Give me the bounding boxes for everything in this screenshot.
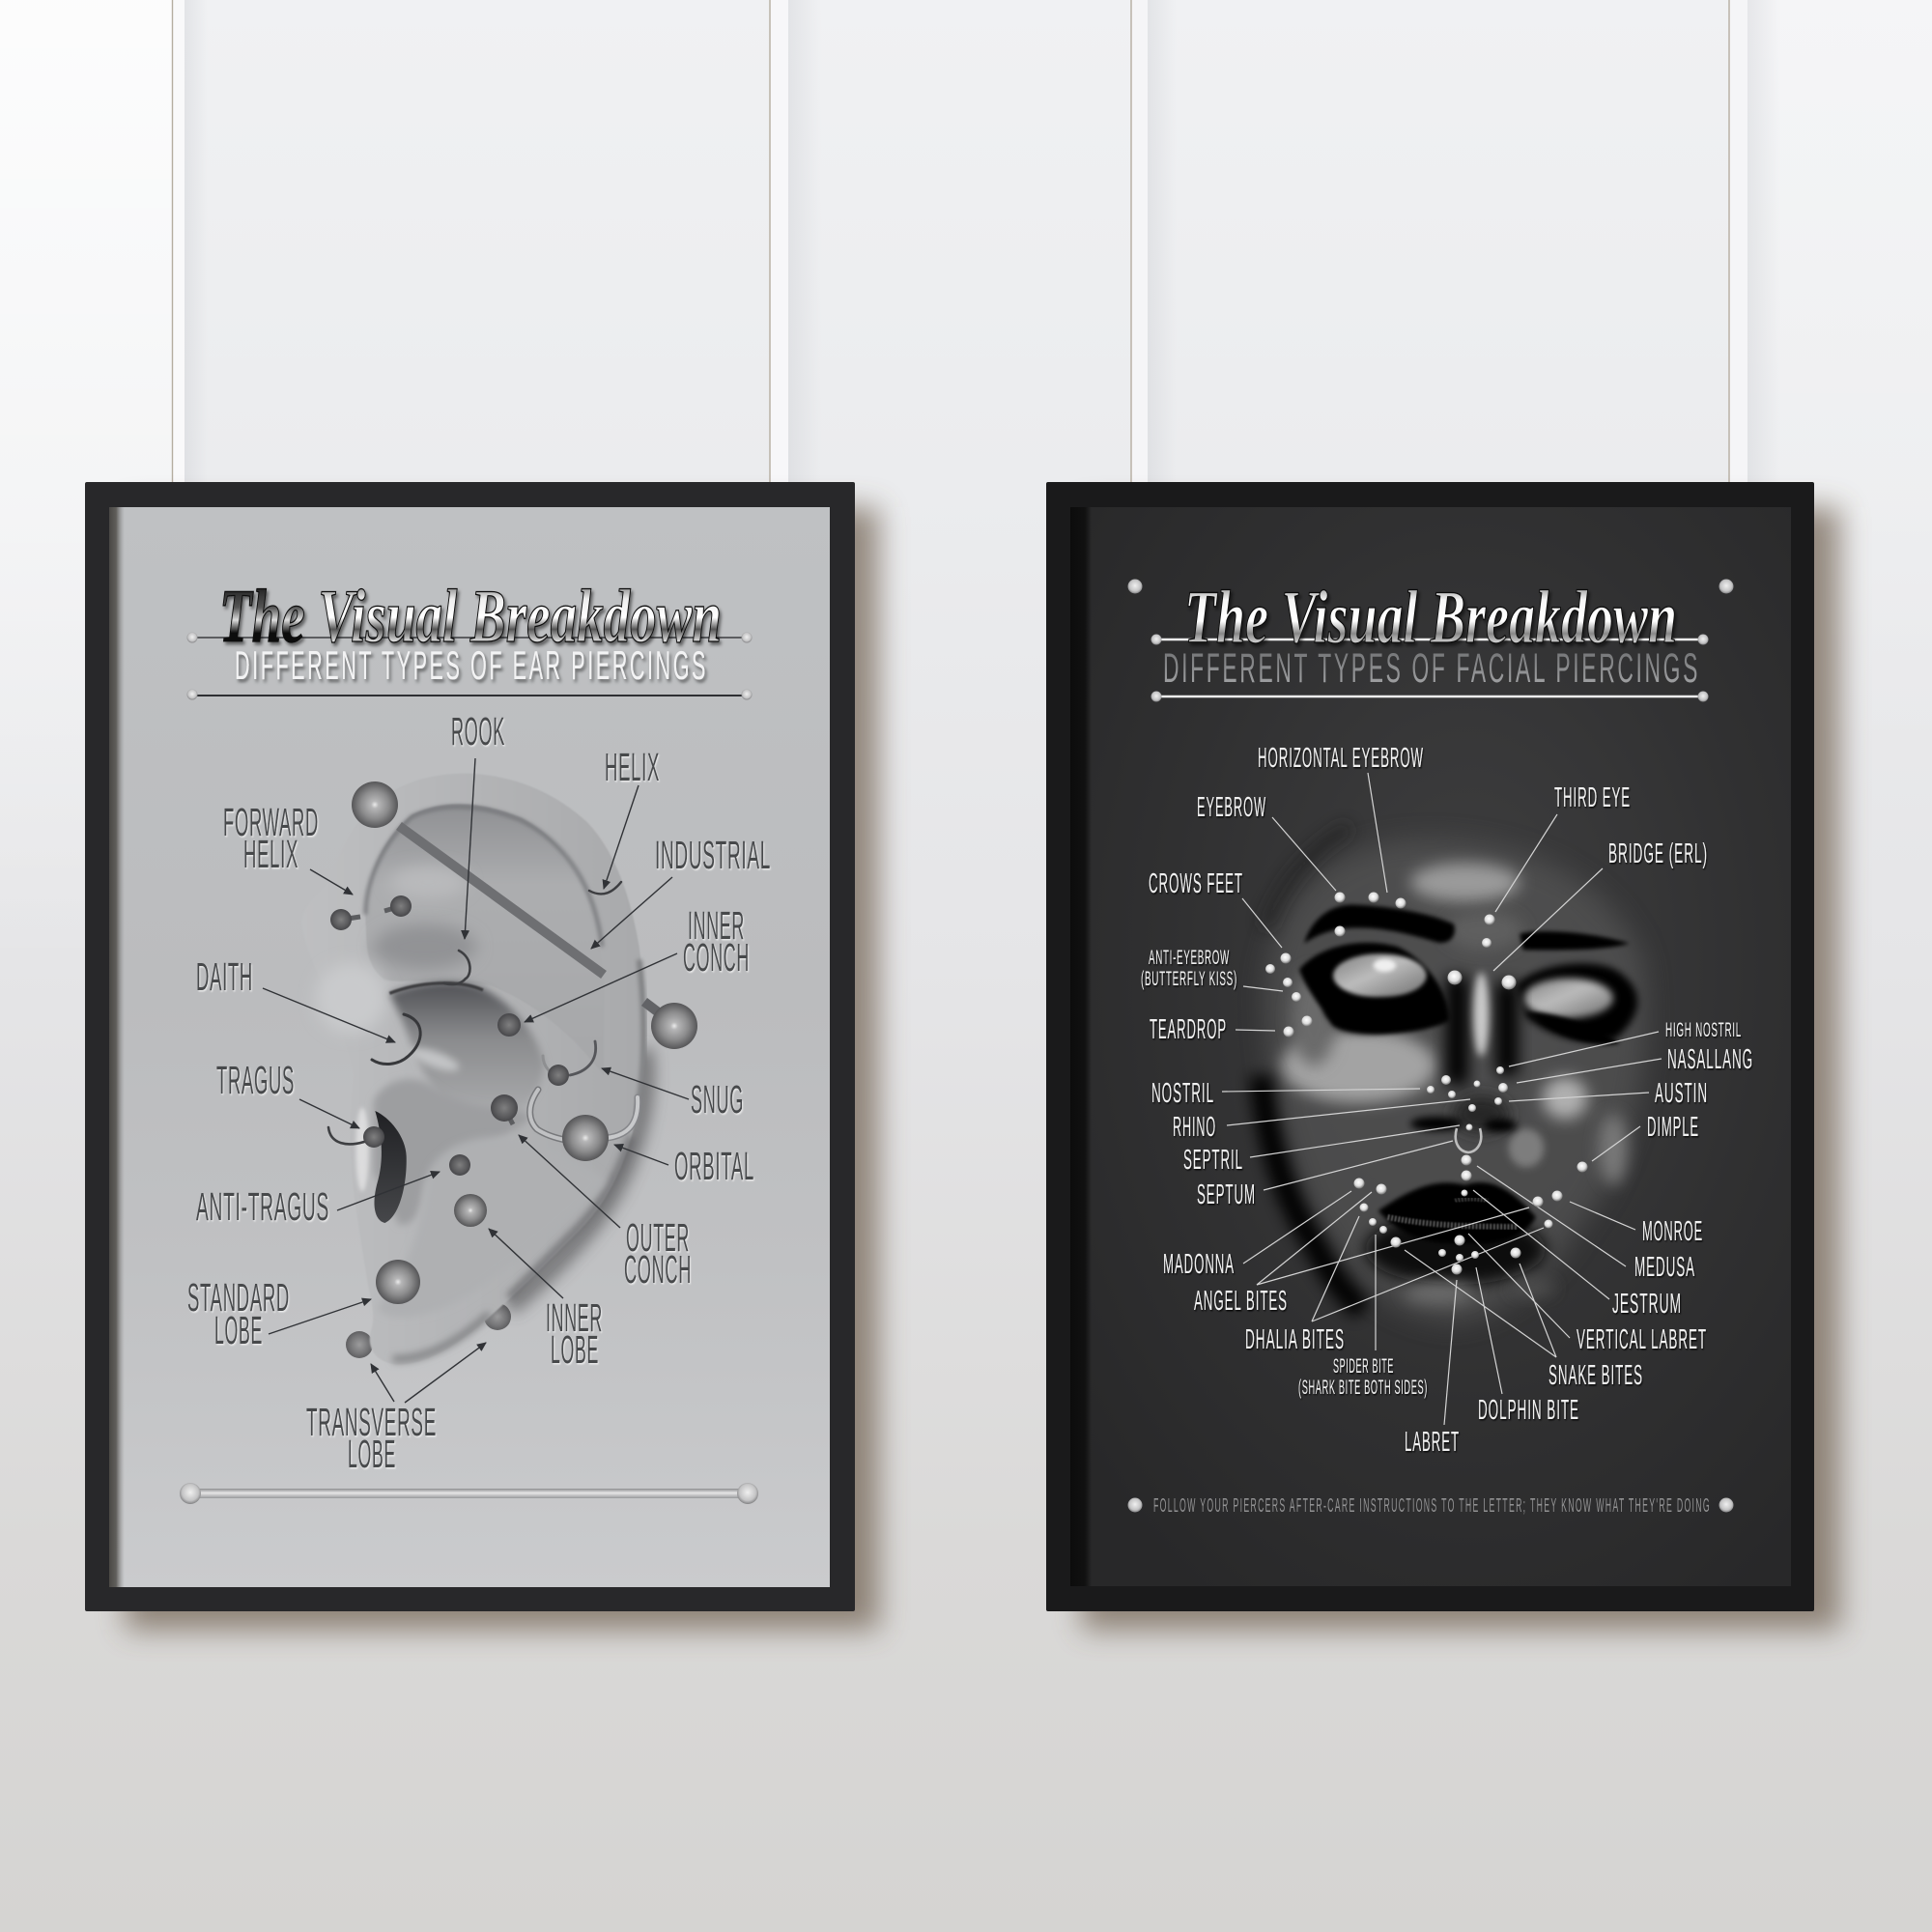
subtitle: ear poster: DIFFERENT TYPES OF EAR PIERCINGS bbox=[235, 642, 708, 688]
ear labels: CONCH bbox=[683, 935, 750, 980]
ear labels: DAITH bbox=[196, 954, 253, 999]
ear labels bbox=[187, 709, 771, 1476]
face labels: HIGH NOSTRIL bbox=[1665, 1019, 1742, 1041]
poster: ear piercings bbox=[85, 482, 855, 1611]
poster: facial piercings bbox=[1046, 482, 1814, 1611]
ear arrows bbox=[263, 758, 689, 1403]
label: inner conch bbox=[683, 903, 750, 980]
label: anti-eyebrow bbox=[1141, 947, 1237, 990]
corner studs bbox=[1128, 580, 1733, 1513]
label: transverse lobe: LOBE bbox=[348, 1432, 396, 1476]
industrial bar bbox=[399, 826, 676, 1026]
ear labels: OUTER bbox=[626, 1215, 690, 1260]
face labels: (SHARK BITE BOTH SIDES) bbox=[1298, 1377, 1428, 1399]
septum ring bbox=[1456, 1128, 1481, 1152]
face labels: ANGEL BITES bbox=[1194, 1286, 1288, 1317]
face labels: SEPTUM bbox=[1197, 1179, 1256, 1210]
ear labels: INNER bbox=[688, 903, 745, 948]
face labels: THIRD EYE bbox=[1554, 782, 1631, 813]
ear labels: LOBE bbox=[551, 1327, 599, 1372]
frame: left poster bbox=[85, 482, 855, 1611]
label: spider bite bbox=[1298, 1355, 1428, 1399]
face labels: VERTICAL LABRET bbox=[1577, 1324, 1707, 1355]
heading rules: ear poster bbox=[187, 632, 752, 699]
face labels: DOLPHIN BITE bbox=[1478, 1395, 1579, 1426]
ear labels: INNER bbox=[546, 1295, 603, 1340]
label: forward helix bbox=[223, 800, 319, 876]
title: ear poster: The Visual Breakdown bbox=[219, 574, 722, 658]
label: spider bite: SPIDER BITE bbox=[1333, 1355, 1394, 1378]
barbell divider bbox=[180, 1483, 758, 1504]
paper: right poster bbox=[1070, 507, 1791, 1586]
face pointer lines bbox=[1222, 773, 1662, 1425]
face labels: MEDUSA bbox=[1634, 1252, 1695, 1283]
transverse lobe studs behind ear bbox=[346, 1303, 511, 1358]
face labels: EYEBROW bbox=[1197, 792, 1266, 823]
ear labels: TRAGUS bbox=[216, 1058, 295, 1102]
poster: ear piercings: INDUSTRIAL bbox=[655, 833, 771, 877]
ear labels: ORBITAL bbox=[674, 1144, 754, 1188]
ear illustration bbox=[302, 774, 645, 1365]
label: inner lobe bbox=[546, 1295, 603, 1372]
face labels: JESTRUM bbox=[1612, 1289, 1682, 1320]
label: transverse lobe bbox=[306, 1400, 437, 1476]
paper: left poster bbox=[109, 507, 830, 1587]
face labels: AUSTIN bbox=[1655, 1078, 1708, 1109]
hanging wires bbox=[172, 0, 1729, 483]
face labels: HORIZONTAL EYEBROW bbox=[1258, 743, 1424, 774]
face labels: DIMPLE bbox=[1647, 1112, 1699, 1143]
face labels: BRIDGE (ERL) bbox=[1608, 838, 1708, 869]
face illustration bbox=[1261, 828, 1646, 1321]
face labels: LABRET bbox=[1405, 1427, 1460, 1458]
label: forward helix: HELIX bbox=[243, 832, 298, 876]
piercing jewellery balls bbox=[330, 781, 697, 1304]
face labels: MADONNA bbox=[1163, 1249, 1235, 1280]
face labels: DHALIA BITES bbox=[1245, 1324, 1345, 1355]
face labels: TEARDROP bbox=[1150, 1014, 1227, 1045]
ear labels: TRANSVERSE bbox=[306, 1400, 437, 1444]
ear labels: FORWARD bbox=[223, 800, 319, 844]
label: standard lobe bbox=[187, 1275, 290, 1352]
face labels: MONROE bbox=[1642, 1216, 1703, 1247]
face labels: SEPTRIL bbox=[1183, 1145, 1243, 1176]
ear labels: CONCH bbox=[624, 1247, 692, 1292]
ear labels: STANDARD bbox=[187, 1275, 290, 1320]
ear labels: ANTI-TRAGUS bbox=[196, 1184, 329, 1229]
frame: right poster bbox=[1046, 482, 1814, 1611]
face labels bbox=[1141, 743, 1753, 1458]
label: anti-eyebrow: ANTI-EYEBROW bbox=[1149, 947, 1230, 969]
label: standard lobe: LOBE bbox=[214, 1308, 263, 1352]
face labels: RHINO bbox=[1173, 1112, 1216, 1143]
face labels: SNAKE BITES bbox=[1548, 1360, 1643, 1391]
poster: facial piercings: NASALLANG bbox=[1667, 1044, 1753, 1075]
face studs bbox=[1265, 893, 1588, 1275]
face labels: NOSTRIL bbox=[1151, 1078, 1214, 1109]
heading rules: face poster bbox=[1151, 634, 1708, 701]
ear labels: HELIX bbox=[605, 745, 660, 789]
label: outer conch bbox=[624, 1215, 692, 1292]
title: face poster: The Visual Breakdown bbox=[1184, 575, 1677, 659]
rings bbox=[328, 882, 638, 1144]
frame shadows bbox=[126, 507, 1840, 1630]
ear labels: ROOK bbox=[451, 709, 505, 753]
face labels: CROWS FEET bbox=[1149, 868, 1243, 899]
ear labels: SNUG bbox=[691, 1077, 744, 1122]
face labels: (BUTTERFLY KISS) bbox=[1141, 968, 1237, 990]
